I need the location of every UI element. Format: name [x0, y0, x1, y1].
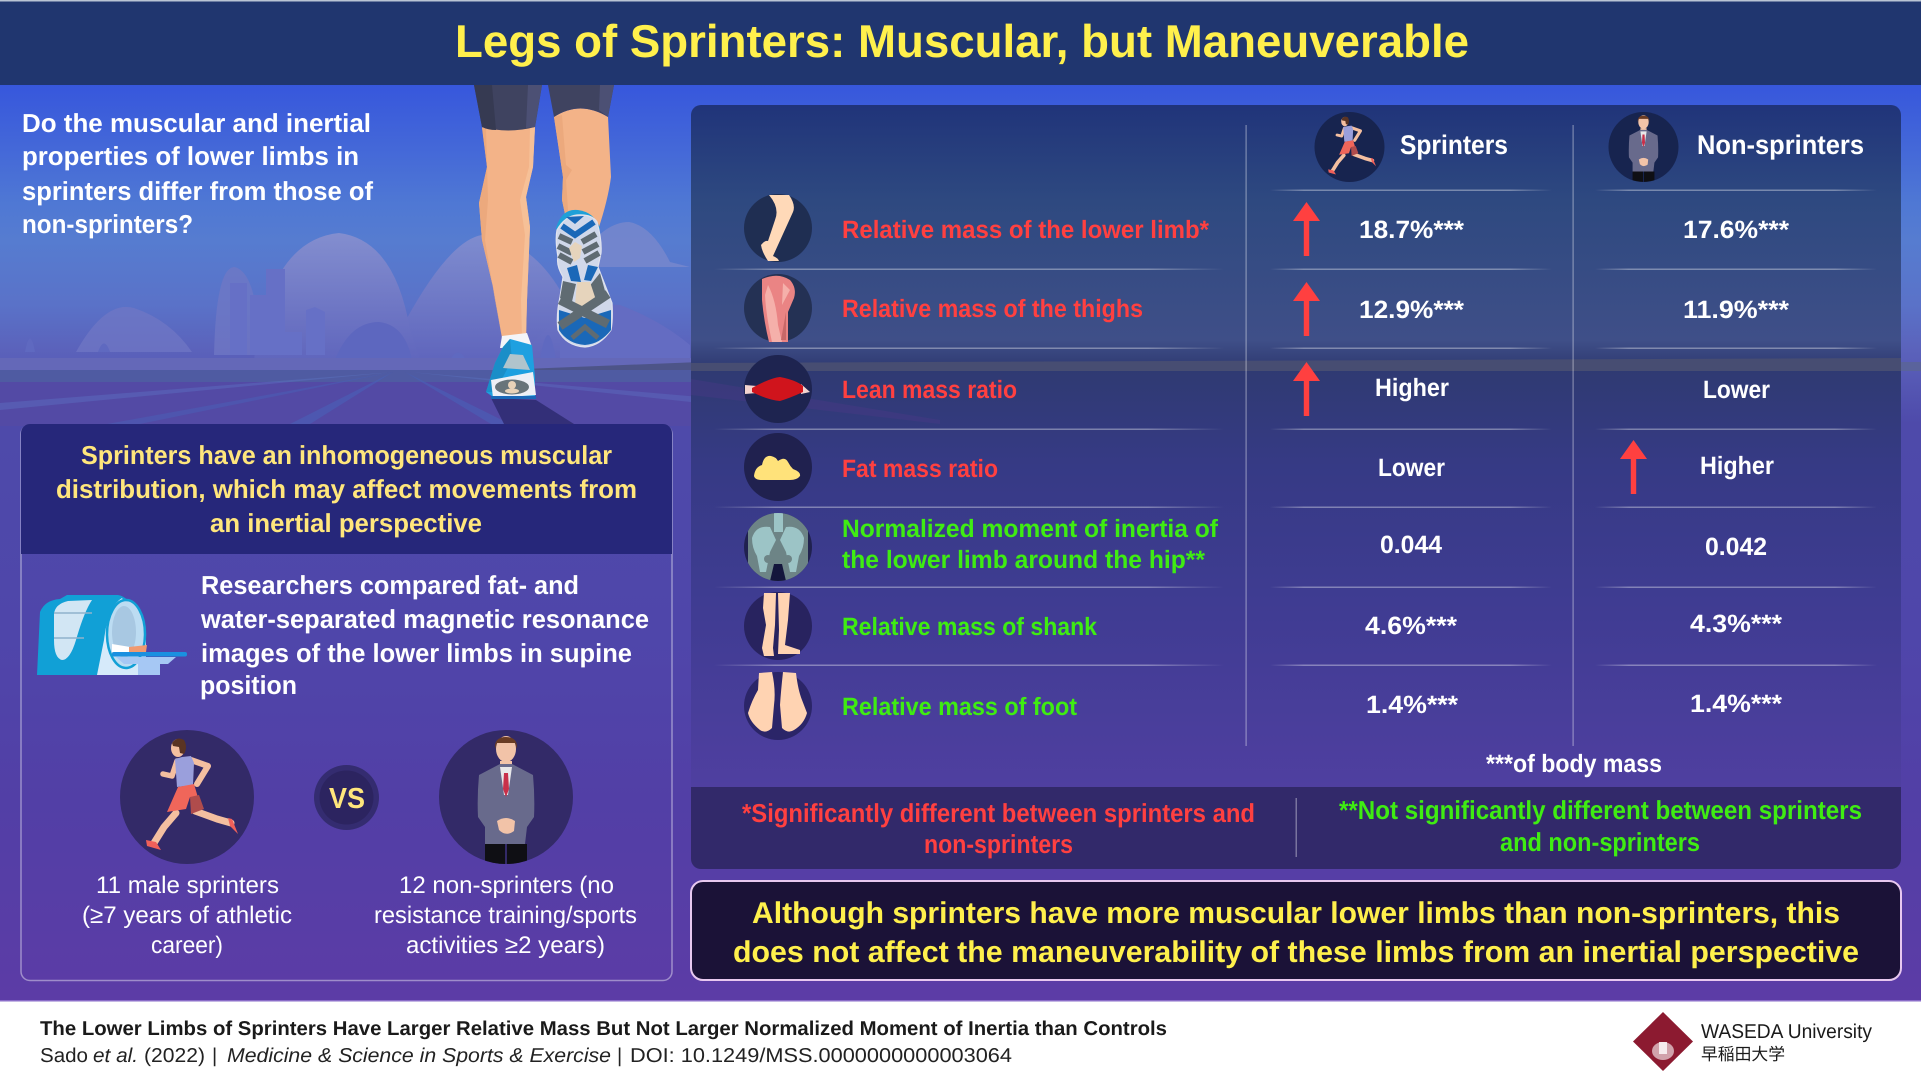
citation: | [617, 1045, 622, 1067]
background skyline [25, 222, 690, 360]
citation: Sado [40, 1045, 88, 1067]
row: fat mass ratio [744, 433, 1774, 501]
sprinter group caption [82, 872, 292, 959]
citation: DOI: 10.1249/MSS.0000000000003064 [630, 1045, 1012, 1067]
citation: | [212, 1045, 217, 1067]
conclusion callout: does not affect the maneuverability of these limbs from an inertial perspective [733, 936, 1859, 969]
citation: (2022) [144, 1045, 205, 1067]
icon: versus badge [314, 765, 379, 830]
legend: no significant difference [1339, 795, 1862, 857]
row: normalized moment of inertia: 0.044 [1380, 531, 1442, 559]
legend: significant difference: non-sprinters [924, 829, 1073, 859]
row: relative mass of the lower limb: Relative mass of the lower limb* [842, 216, 1209, 244]
legend band [691, 787, 1901, 869]
method description: water-separated magnetic resonance [200, 604, 649, 634]
row: normalized moment of inertia: the lower limb around the hip** [842, 546, 1205, 574]
research question [22, 108, 373, 239]
citation [40, 1045, 1012, 1067]
column header: non-sprinters [1608, 112, 1864, 182]
row: relative mass of foot: Relative mass of foot [842, 693, 1078, 721]
row: fat mass ratio: Lower [1378, 454, 1445, 482]
conclusion callout [691, 881, 1901, 980]
row: lean mass ratio: Lean mass ratio [842, 376, 1017, 404]
row: relative mass of shank [744, 592, 1782, 660]
legend: no significant difference: **Not significantly different between sprinters [1339, 795, 1862, 825]
icon: versus badge: VS [329, 783, 365, 815]
paper title: The Lower Limbs of Sprinters Have Larger Relative Mass But Not Larger Normalized Moment of Inertia than Controls [40, 1018, 1167, 1040]
non-sprinter group caption: activities ≥2 years) [406, 932, 605, 959]
row: relative mass of the thighs [744, 274, 1789, 342]
row: fat mass ratio: Fat mass ratio [842, 455, 998, 483]
study summary heading: an inertial perspective [210, 508, 482, 538]
row: relative mass of the thighs: 11.9%*** [1683, 296, 1789, 324]
panel: study methods [21, 424, 672, 980]
row: relative mass of foot: 1.4%*** [1690, 690, 1782, 718]
research question: non-sprinters? [22, 209, 193, 239]
method description [200, 570, 649, 700]
citation: et al. [93, 1045, 138, 1067]
column header: non-sprinters: Non-sprinters [1697, 130, 1864, 160]
research question: Do the muscular and inertial [22, 108, 371, 138]
table footnote: ***of body mass [1486, 750, 1662, 778]
row: relative mass of shank: Relative mass of shank [842, 613, 1097, 641]
row: relative mass of the lower limb [744, 194, 1789, 262]
logo: Waseda University [1633, 1012, 1872, 1071]
legend: no significant difference: and non-sprinters [1500, 827, 1700, 857]
method description: Researchers compared fat- and [201, 570, 579, 600]
row: relative mass of the thighs: 12.9%*** [1359, 296, 1464, 324]
column header: sprinters: Sprinters [1400, 130, 1508, 160]
logo: Waseda University: WASEDA University [1701, 1021, 1872, 1043]
row: relative mass of foot: 1.4%*** [1366, 691, 1458, 719]
row: relative mass of shank: 4.6%*** [1365, 612, 1457, 640]
panel: comparison table [691, 105, 1901, 787]
icon: MRI scanner [37, 595, 187, 675]
study summary heading: Sprinters have an inhomogeneous muscular [81, 440, 612, 470]
study summary heading [21, 424, 672, 554]
method description: images of the lower limbs in supine [201, 638, 632, 668]
legend: significant difference [742, 798, 1255, 859]
legend: significant difference: *Significantly different between sprinters and [742, 798, 1255, 828]
title bar: Legs of Sprinters: Muscular, but Maneuverable [455, 15, 1469, 67]
non-sprinter group caption: 12 non-sprinters (no [399, 872, 614, 899]
study summary heading: distribution, which may affect movements from [56, 474, 637, 504]
logo: Waseda University: 早稲田大学 [1701, 1045, 1785, 1064]
row: normalized moment of inertia [744, 513, 1767, 581]
sprinter group caption: career) [151, 932, 223, 959]
row: lean mass ratio: Higher [1375, 374, 1449, 402]
row: relative mass of the lower limb: 18.7%*** [1359, 216, 1464, 244]
row: lean mass ratio: Lower [1703, 376, 1770, 404]
road [0, 358, 1921, 426]
non-sprinter group caption: resistance training/sports [374, 902, 637, 929]
row: lean mass ratio [744, 355, 1770, 423]
row: normalized moment of inertia: Normalized moment of inertia of [842, 515, 1219, 543]
illustration: running legs [474, 85, 614, 424]
footer [0, 1000, 1921, 1081]
row: normalized moment of inertia: 0.042 [1705, 533, 1767, 561]
conclusion callout: Although sprinters have more muscular lower limbs than non-sprinters, this [752, 897, 1840, 930]
research question: properties of lower limbs in [22, 141, 359, 171]
row: relative mass of foot [744, 672, 1782, 740]
sprinter group caption: (≥7 years of athletic [82, 902, 292, 929]
row: relative mass of the lower limb: 17.6%*** [1683, 216, 1789, 244]
icon: non-sprinter [439, 730, 573, 865]
citation: Medicine & Science in Sports & Exercise [227, 1045, 611, 1067]
method description: position [200, 670, 297, 700]
research question: sprinters differ from those of [22, 176, 373, 206]
non-sprinter group caption [374, 872, 637, 959]
title bar [0, 0, 1921, 85]
row: fat mass ratio: Higher [1700, 452, 1774, 480]
row: relative mass of shank: 4.3%*** [1690, 610, 1782, 638]
icon: sprinter [120, 730, 254, 864]
sprinter group caption: 11 male sprinters [96, 872, 279, 899]
row: relative mass of the thighs: Relative mass of the thighs [842, 295, 1143, 323]
column header: sprinters [1314, 112, 1508, 182]
